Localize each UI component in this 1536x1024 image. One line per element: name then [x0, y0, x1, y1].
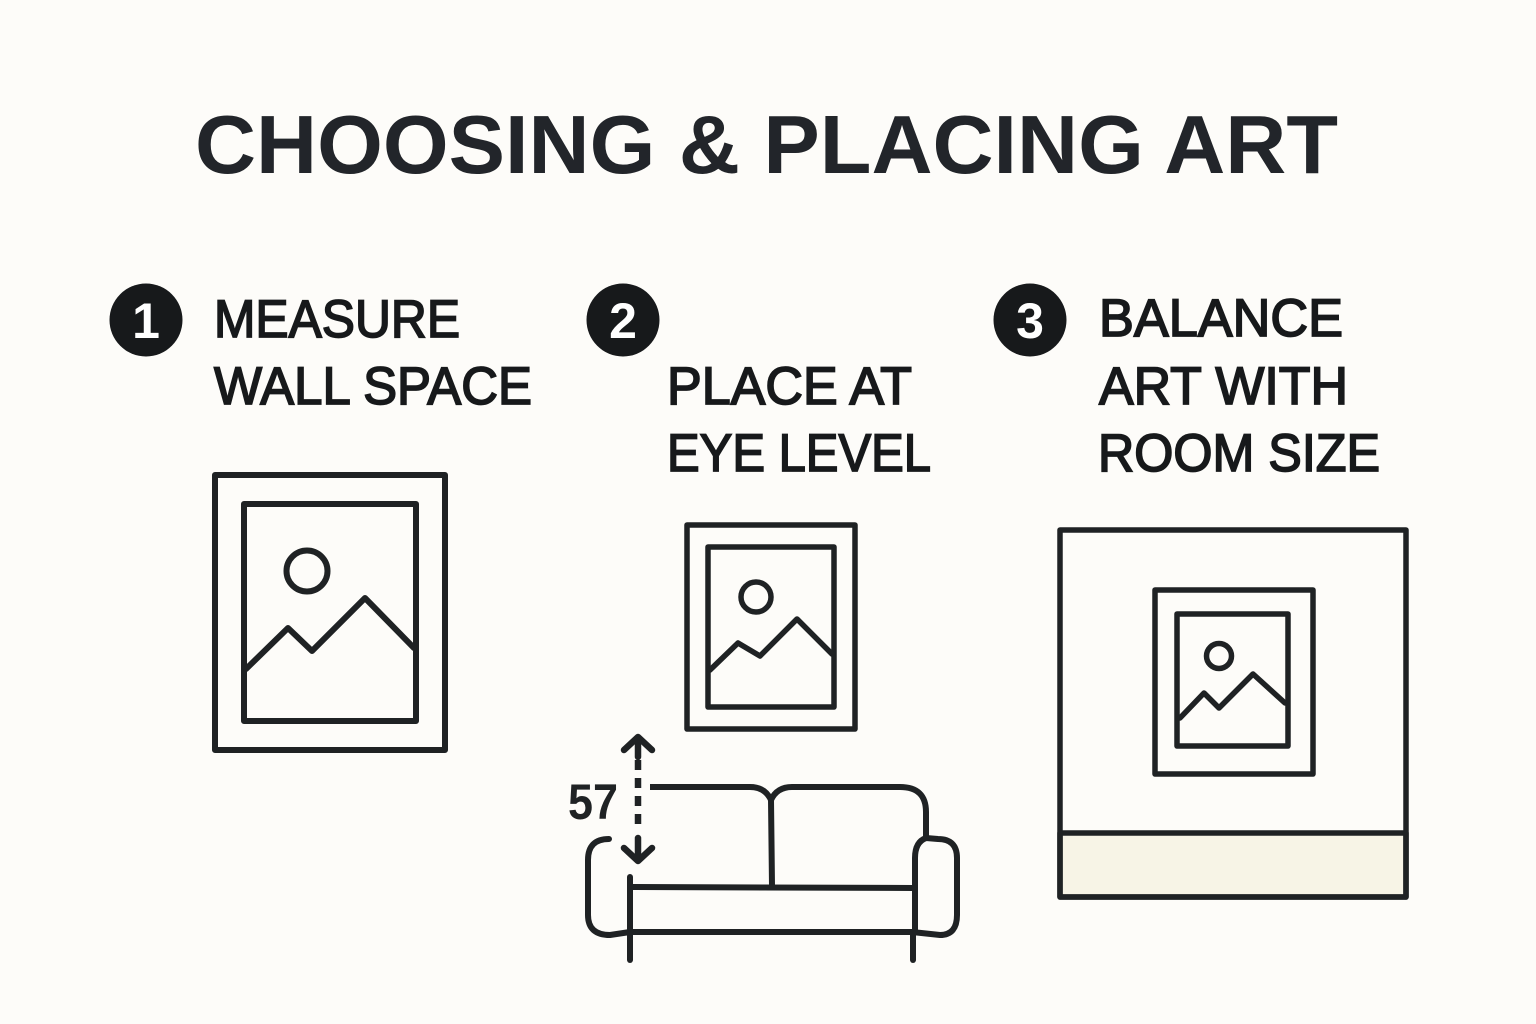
title: CHOOSING & PLACING ART — [195, 98, 1338, 191]
icon: height arrow — [624, 737, 652, 861]
badge: number 1: 1 — [132, 293, 160, 349]
heading: balance art with room size: BALANCE — [1099, 289, 1343, 348]
heading: balance art with room size — [1098, 289, 1380, 483]
heading: place at eye level: EYE LEVEL — [667, 424, 931, 483]
floor — [1060, 833, 1406, 897]
heading: measure wall space: WALL SPACE — [214, 357, 532, 416]
badge: number 2 — [586, 284, 660, 356]
heading: place at eye level — [667, 357, 931, 483]
panel: step 3 balance art with room size — [994, 284, 1406, 897]
panel: step 2 place at eye level — [568, 284, 957, 960]
icon: room with framed picture — [1060, 530, 1406, 897]
heading: balance art with room size: ROOM SIZE — [1098, 424, 1380, 483]
icon: framed picture — [215, 475, 445, 750]
heading: balance art with room size: ART WITH — [1099, 357, 1348, 416]
badge: number 3 — [994, 284, 1066, 356]
heading: measure wall space — [214, 290, 532, 416]
panel: step 1 measure wall space — [110, 284, 532, 750]
badge: number 3: 3 — [1016, 293, 1044, 349]
icon: framed picture — [687, 525, 855, 729]
icon: sofa — [588, 787, 957, 960]
badge: number 2: 2 — [609, 293, 637, 349]
label: 57: 57 — [568, 774, 618, 830]
badge: number 1 — [110, 284, 182, 356]
heading: place at eye level: PLACE AT — [667, 357, 912, 416]
heading: measure wall space: MEASURE — [214, 290, 460, 349]
